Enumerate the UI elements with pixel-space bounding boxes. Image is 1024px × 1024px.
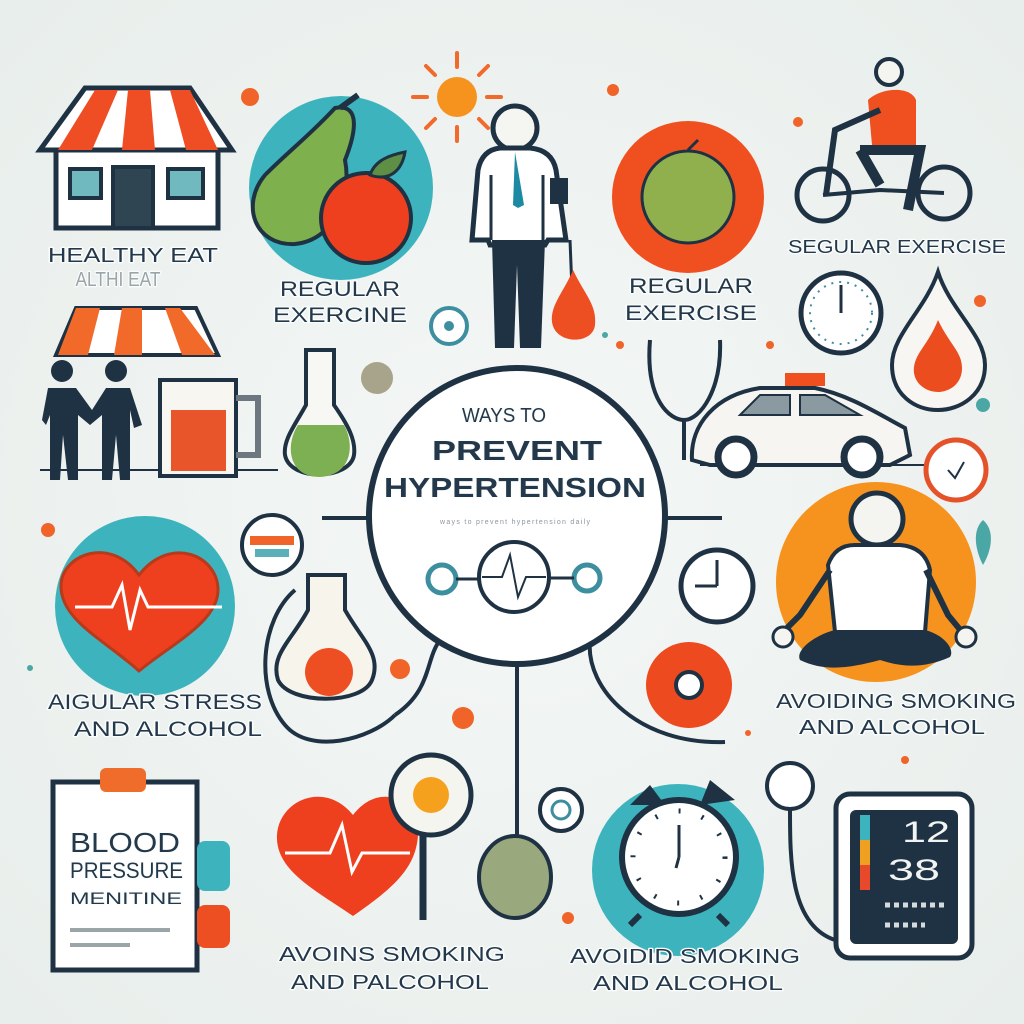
icon: digital blood pressure monitor: 38 bbox=[888, 854, 940, 887]
label: regular exercine: EXERCINE bbox=[273, 304, 407, 327]
label: blood pressure monitoring bbox=[70, 827, 183, 908]
icon: small gauge bbox=[431, 308, 467, 344]
heading: healthy eat: ALTHI EAT bbox=[76, 269, 160, 291]
icon: heart with magnifier bbox=[277, 755, 471, 920]
icon: awning bbox=[56, 308, 218, 355]
label: blood pressure monitoring: PRESSURE bbox=[70, 858, 183, 883]
label: aigular stress bbox=[48, 691, 262, 741]
label: aigular stress: AIGULAR STRESS bbox=[48, 691, 262, 714]
label: regular exercine: REGULAR bbox=[280, 278, 400, 301]
icon: green flask bbox=[285, 350, 354, 477]
icon: storefront bbox=[40, 88, 232, 228]
icon: mug bbox=[160, 380, 258, 476]
panel: central circle bbox=[369, 368, 665, 664]
icon: small pill gauge bbox=[242, 515, 302, 575]
title: PREVENT bbox=[432, 435, 602, 466]
label: regular exercise: EXERCISE bbox=[625, 302, 757, 325]
icon: man with blood pressure cuff bbox=[472, 106, 595, 348]
icon: car bbox=[692, 373, 910, 475]
icon: orange target bbox=[646, 642, 732, 728]
label: avoins smoking: AVOINS SMOKING bbox=[279, 944, 505, 966]
title bbox=[384, 405, 646, 503]
label: avoins smoking bbox=[279, 944, 505, 994]
icon: digital blood pressure monitor bbox=[767, 763, 972, 958]
icon: blood drop bbox=[892, 272, 985, 410]
icon: two people bbox=[42, 360, 142, 480]
decorative confetti bbox=[41, 84, 986, 924]
icon: clipboard bbox=[53, 768, 230, 970]
caption: ways to prevent hypertension daily bbox=[439, 519, 590, 526]
icon: cyclist bbox=[797, 59, 970, 221]
icon: wall clock bbox=[801, 273, 881, 353]
icon: pear and tomato on teal circle bbox=[249, 95, 433, 280]
title: HYPERTENSION bbox=[384, 472, 646, 503]
label: avoiding smoking: AVOIDING SMOKING bbox=[776, 691, 1016, 713]
icon: small grey pebble bbox=[361, 362, 393, 394]
label: avoidid smoking: AND ALCOHOL bbox=[593, 973, 783, 995]
label: avoins smoking: AND PALCOHOL bbox=[291, 972, 489, 994]
label: avoiding smoking bbox=[776, 691, 1016, 739]
icon: small timer bbox=[926, 440, 986, 500]
label: segular exercise: SEGULAR EXERCISE bbox=[788, 237, 1006, 257]
icon: small ring bbox=[540, 789, 582, 831]
label: aigular stress: AND ALCOHOL bbox=[74, 718, 262, 741]
icon: meditating person bbox=[773, 482, 976, 682]
icon: pendulum bulb bbox=[479, 836, 551, 918]
icon: green apple on orange circle bbox=[612, 121, 764, 273]
label: blood pressure monitoring: MENITINE bbox=[70, 889, 182, 908]
icon: stethoscope heartbeat bbox=[428, 542, 600, 612]
icon: sun bbox=[413, 53, 501, 141]
icon: digital blood pressure monitor: 12 bbox=[902, 816, 950, 849]
label: avoidid smoking: AVOIDID SMOKING bbox=[570, 946, 800, 968]
heading: healthy eat: HEALTHY EAT bbox=[48, 245, 218, 267]
icon: orange flask with tube bbox=[265, 575, 395, 742]
label: blood pressure monitoring: BLOOD bbox=[70, 827, 180, 858]
icon: analog clock bbox=[681, 550, 753, 622]
heading: healthy eat bbox=[48, 245, 218, 291]
label: regular exercise: REGULAR bbox=[629, 275, 753, 298]
icon: stethoscope bbox=[649, 340, 720, 460]
label: regular exercine bbox=[273, 278, 407, 327]
icon: alarm clock bbox=[592, 780, 764, 956]
label: avoiding smoking: AND ALCOHOL bbox=[799, 717, 985, 739]
icon: heart with pulse bbox=[55, 516, 235, 696]
title: WAYS TO bbox=[462, 405, 546, 427]
label: regular exercise bbox=[625, 275, 757, 325]
label: avoidid smoking bbox=[570, 946, 800, 995]
